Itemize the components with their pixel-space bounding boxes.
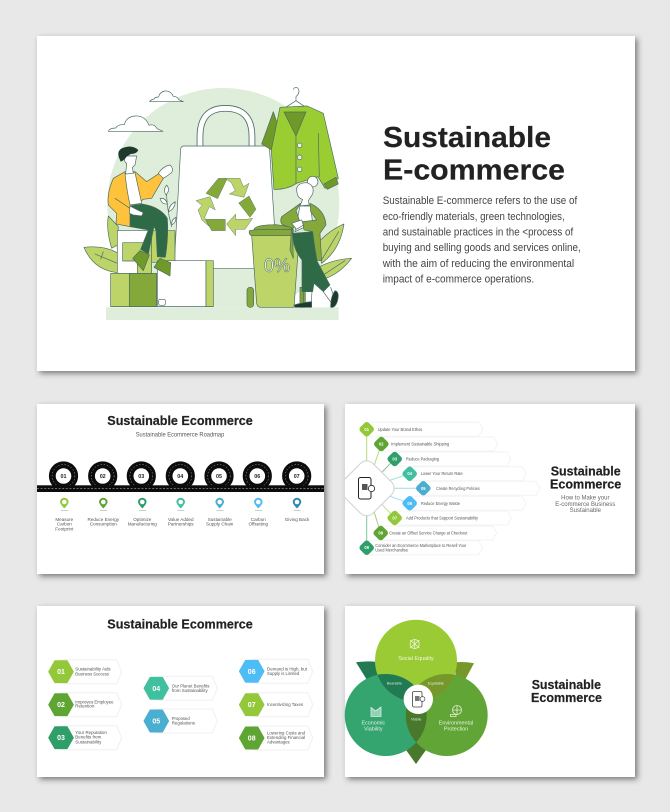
venn labels: Viable xyxy=(411,718,422,722)
road graphic with numbered loops: 06 xyxy=(254,474,260,480)
heading: venn: Ecommerce xyxy=(531,691,602,705)
illustration: hanging cardigan xyxy=(262,87,338,189)
reason labels: Sustainability Aids xyxy=(75,667,111,673)
reason labels: Sustainability xyxy=(75,739,102,745)
center phone icon xyxy=(404,685,433,714)
step labels: Create an Offset Service Charge at Checkout xyxy=(389,530,468,536)
venn labels: Economic xyxy=(361,721,385,727)
numbered hexagons: 08 xyxy=(248,736,256,742)
numbered hexagons: 04 xyxy=(152,686,160,693)
heading: reasons: Sustainable Ecommerce xyxy=(107,616,253,631)
step labels: Reduce Energy Waste xyxy=(421,501,460,506)
heading: venn xyxy=(531,678,602,705)
subheading: how to: E-commerce Business xyxy=(555,502,615,508)
roadmap step labels: Reduce Energy xyxy=(87,517,120,522)
venn labels xyxy=(361,656,473,733)
reason labels: Regulations xyxy=(172,720,196,726)
subheading: how to xyxy=(555,496,615,514)
venn labels: Equitable xyxy=(428,682,444,686)
step labels: Lower Your Return Rate xyxy=(421,471,463,476)
text block: definition: impact of e-commerce operations. xyxy=(383,274,534,286)
venn labels: Environmental xyxy=(439,721,473,727)
numbered diamonds xyxy=(358,421,432,556)
roadmap step labels: Consumption xyxy=(90,522,117,527)
text block: definition: eco-friendly materials, green technologies, xyxy=(383,211,565,223)
step labels: Create Recycling Policies xyxy=(436,486,480,491)
label pills xyxy=(61,659,313,750)
numbered hexagons xyxy=(49,661,264,749)
reason labels: Retention xyxy=(75,704,95,710)
venn labels: Social Equality xyxy=(398,656,434,662)
connector lines xyxy=(367,429,423,548)
step labels: Update Your Brand Ethos xyxy=(378,427,423,432)
panel: how to make business sustainable slide xyxy=(336,404,635,574)
roadmap step labels xyxy=(55,517,310,531)
icon: environmental protection xyxy=(450,706,462,716)
step labels: Implement Sustainable Shipping xyxy=(391,442,450,446)
roadmap step labels: Footprint xyxy=(55,526,74,531)
road graphic with numbered loops: 02 xyxy=(100,474,106,480)
roadmap step labels: Carbon xyxy=(57,522,72,527)
subheading: how to: Sustainable xyxy=(570,508,602,514)
step labels: Consider an Ecommerce Marketplace to Resell Your xyxy=(375,543,467,548)
reason labels: Improves Employee xyxy=(75,699,114,705)
heading: how to xyxy=(550,464,621,491)
central diamond with phone icon xyxy=(345,460,394,516)
subheading: how to: How to Make your xyxy=(561,496,609,502)
numbered diamonds: 04 xyxy=(407,471,413,476)
roadmap step labels: Giving Back xyxy=(285,517,310,522)
numbered hexagons: 07 xyxy=(248,702,256,709)
road graphic with numbered loops: 01 xyxy=(60,474,66,480)
numbered diamonds: 05 xyxy=(421,486,426,491)
panel: main intro slide xyxy=(37,36,635,371)
road graphic with numbered loops: 04 xyxy=(177,474,183,480)
panel: venn diagram slide xyxy=(345,606,635,777)
numbered diamonds: 06 xyxy=(407,501,413,506)
numbered hexagons: 05 xyxy=(152,718,160,726)
reason labels: Supply is Limited xyxy=(267,671,300,677)
reason labels: Lowering Costs and xyxy=(267,730,305,736)
heading: roadmap: Sustainable Ecommerce xyxy=(107,413,253,428)
reason labels: Extending Financial xyxy=(267,735,305,741)
roadmap step labels: Supply Chain xyxy=(206,522,234,527)
location pins xyxy=(60,498,301,511)
road graphic with numbered loops: 03 xyxy=(138,474,144,480)
venn diagram xyxy=(345,620,488,764)
reason labels: Our Planet Benefits xyxy=(172,683,210,689)
step labels: Add Products that Support Sustainability xyxy=(406,516,479,520)
title: Sustainable E-commerce xyxy=(383,122,565,186)
roadmap step labels: Optimize xyxy=(133,517,152,522)
numbered hexagons: 02 xyxy=(57,702,65,709)
numbered diamonds: 09 xyxy=(364,545,370,550)
title: Sustainable E-commerce: Sustainable xyxy=(383,122,551,154)
road graphic with numbered loops: 07 xyxy=(294,474,300,480)
numbered hexagons: 06 xyxy=(248,669,256,676)
numbered diamonds: 01 xyxy=(364,427,370,432)
reason labels: Proposed xyxy=(172,716,190,722)
numbered hexagons: 03 xyxy=(57,735,65,742)
numbered diamonds: 03 xyxy=(392,456,398,462)
venn labels: Bearable xyxy=(387,682,402,686)
step labels: Reduce Packaging xyxy=(406,456,439,462)
text block: definition: with the aim of reducing the environmental xyxy=(382,258,574,270)
illustration: seated man with box and plant xyxy=(84,147,213,307)
roadmap step labels: Partnerships xyxy=(168,522,194,527)
icon: recycling arrows xyxy=(196,178,256,236)
arrow bars xyxy=(367,422,540,555)
reason labels xyxy=(75,666,308,746)
reason labels: Demand is High, but xyxy=(267,666,308,672)
title: Sustainable E-commerce: E-commerce xyxy=(383,154,565,186)
reason labels: Advantages xyxy=(267,740,290,746)
text block: definition: and sustainable practices in the <process of xyxy=(383,226,573,238)
step labels xyxy=(375,427,480,553)
heading: how to: Ecommerce xyxy=(550,477,621,491)
roadmap step labels: Manufacturing xyxy=(128,522,157,527)
illustration: standing woman with recycling bin xyxy=(247,176,352,307)
roadmap step labels: Offsetting xyxy=(249,522,269,527)
roadmap step labels: Sustainable xyxy=(208,517,232,522)
reason labels: Your Reputation xyxy=(75,730,107,736)
roadmap step labels: Measure xyxy=(55,517,74,522)
road graphic with numbered loops xyxy=(37,465,324,492)
text block: definition xyxy=(382,195,581,286)
numbered hexagons: 01 xyxy=(57,669,65,676)
step labels: Used Merchandise xyxy=(375,548,408,553)
text block: definition: Sustainable E-commerce refers to the use of xyxy=(383,195,577,207)
reason labels: from Sustainability xyxy=(172,688,208,694)
illustration: sustainable shopping scene xyxy=(84,87,352,320)
heading: how to: Sustainable xyxy=(551,464,621,478)
icon: social equality xyxy=(410,639,420,649)
roadmap step labels: Value Added xyxy=(168,517,194,522)
venn labels: Viability xyxy=(364,727,383,733)
numbered diamonds: 08 xyxy=(378,530,384,536)
subheading: roadmap: Sustainable Ecommerce Roadmap xyxy=(136,433,225,439)
reason labels: Incentivizing Taxes xyxy=(267,702,304,708)
venn labels: Protection xyxy=(444,727,468,733)
heading: venn: Sustainable xyxy=(532,678,601,692)
reason labels: Benefits from xyxy=(75,735,101,741)
reason labels: Business Success xyxy=(75,671,110,677)
panel: reasons slide xyxy=(37,606,324,777)
illustration: standing woman with recycling bin: 0% xyxy=(264,256,290,277)
text block: definition: buying and selling goods and services online, xyxy=(383,242,581,254)
icon: economic viability xyxy=(371,707,381,716)
numbered diamonds: 02 xyxy=(379,442,384,446)
road graphic with numbered loops: 05 xyxy=(216,474,222,480)
roadmap step labels: Carbon xyxy=(251,517,266,522)
panel: roadmap slide xyxy=(37,404,324,574)
numbered diamonds: 07 xyxy=(392,516,398,520)
